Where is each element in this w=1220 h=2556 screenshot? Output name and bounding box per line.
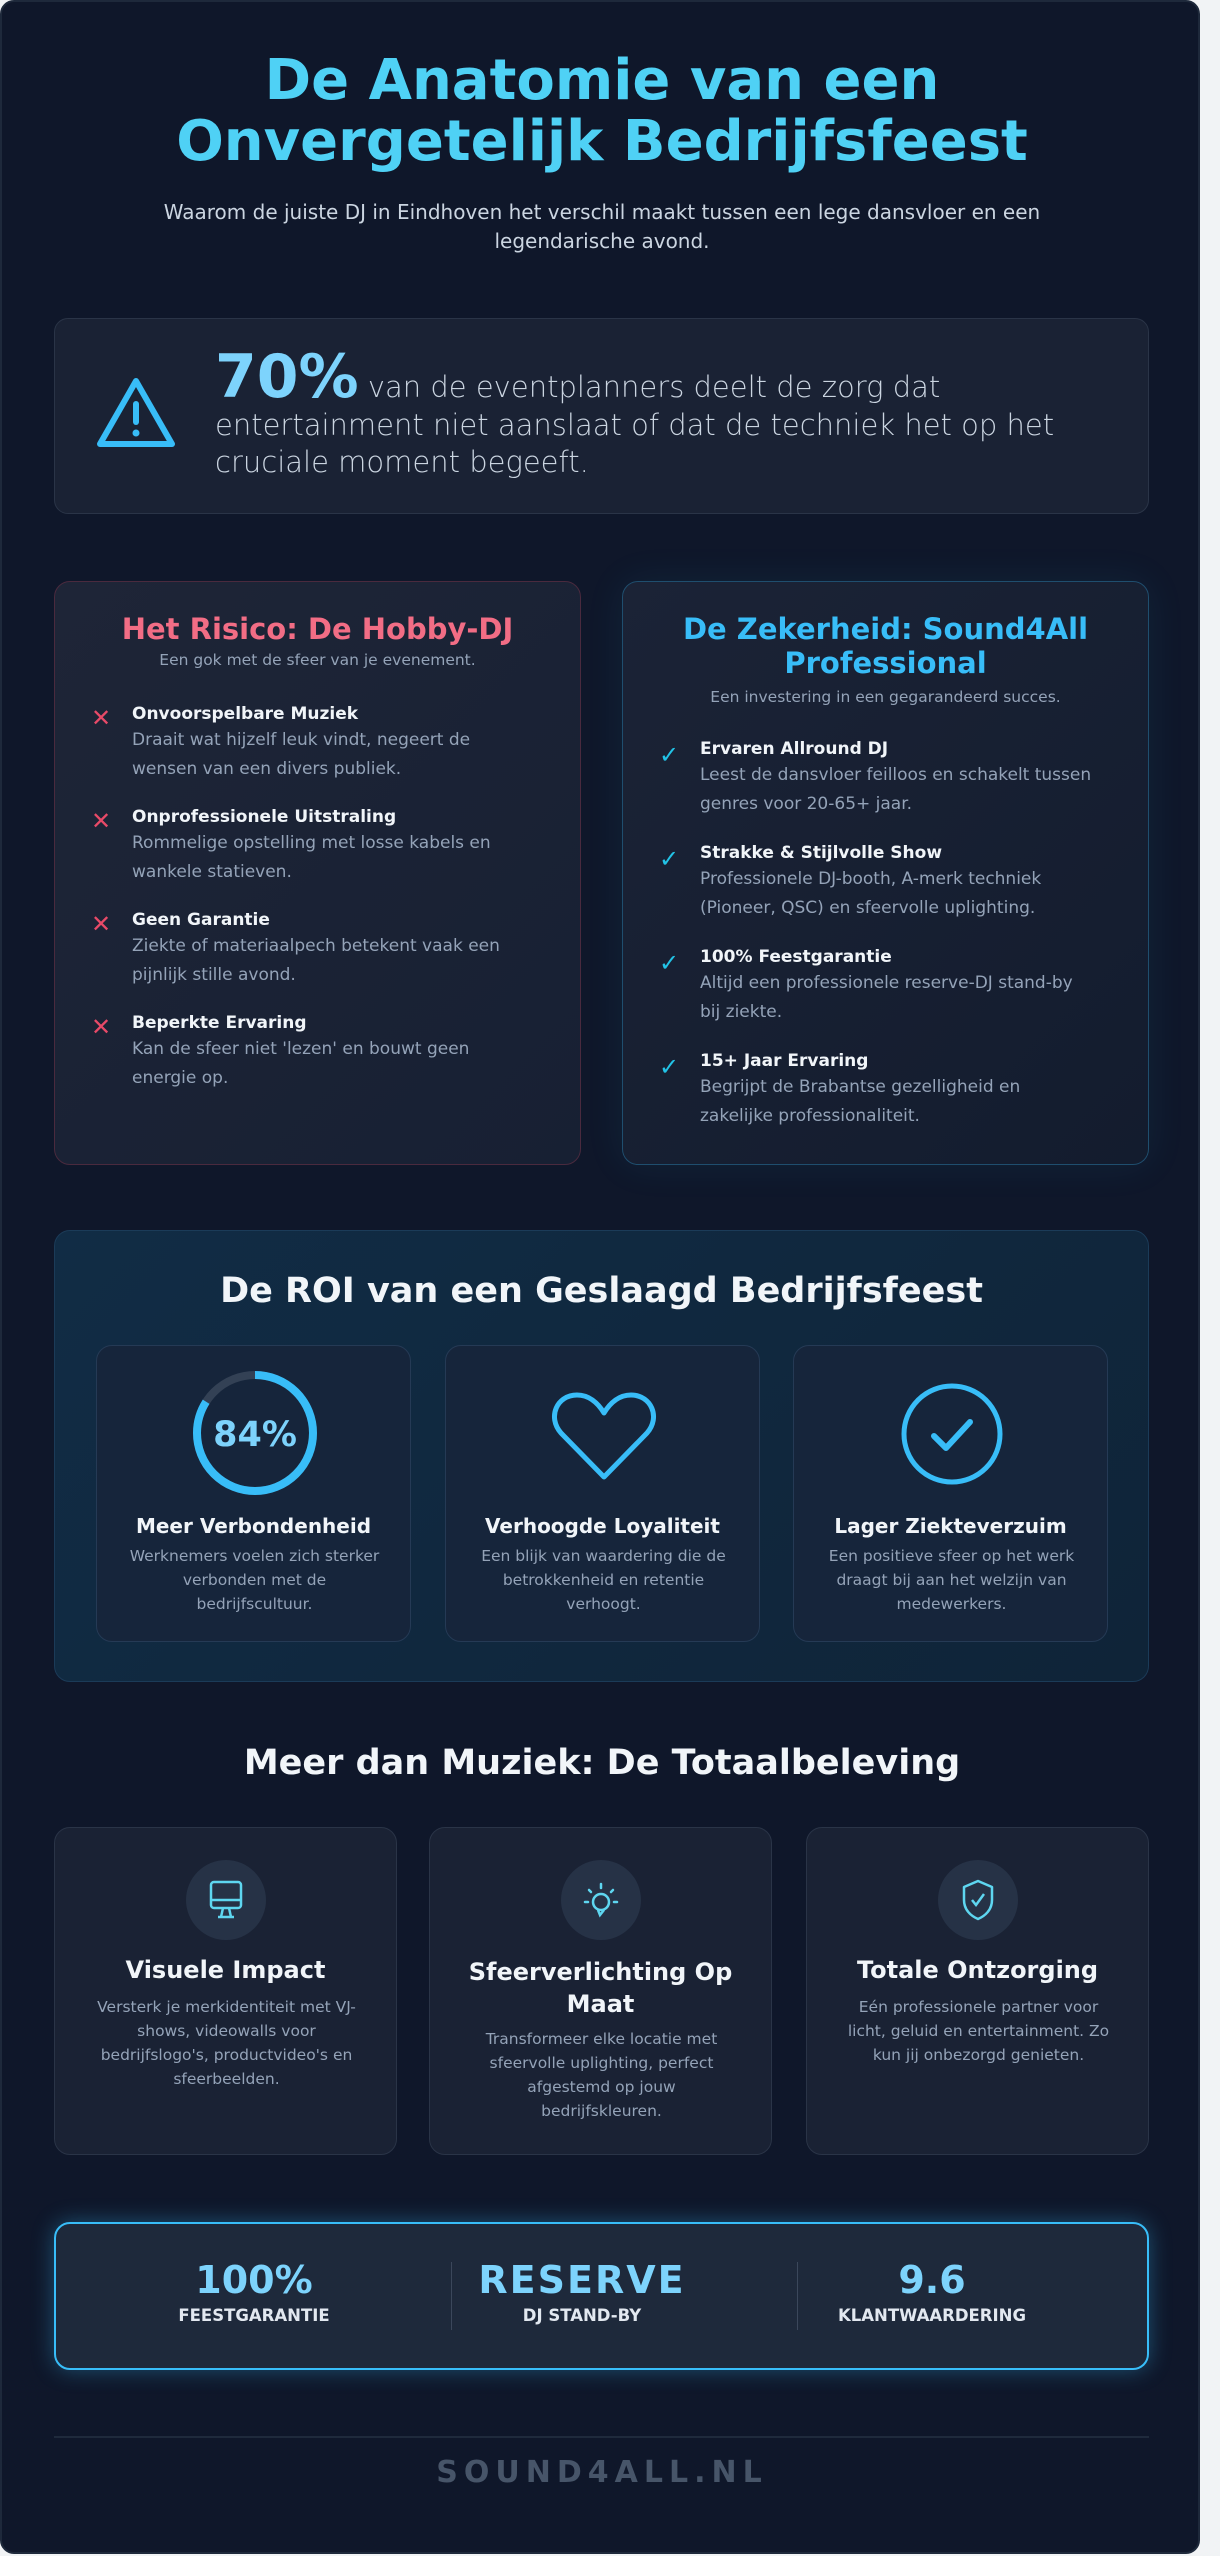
icon: shield (938, 1860, 1018, 1940)
item: feestgarantie: Altijd een professionele reserve-DJ stand-by bij ziekte. (700, 973, 1073, 1022)
item: beperkte ervaring: Beperkte Ervaring (132, 1013, 306, 1033)
item: feestgarantie: 100% Feestgarantie (700, 947, 892, 967)
chart: 84% ring: 84% (213, 1415, 297, 1455)
card: verbondenheid: Werknemers voelen zich sterker (130, 1547, 379, 1565)
card: sfeerverlichting: Maat (567, 1990, 634, 2018)
heading: De Zekerheid: Sound4All (683, 612, 1088, 646)
icon: lightbulb (561, 1860, 641, 1940)
card: sfeerverlichting: Transformeer elke locatie met sfeervolle uplighting, perfect afgestemd op jouw bedrijfskleuren. (486, 2030, 717, 2120)
item: ervaring: Begrijpt de Brabantse gezelligheid en zakelijke professionaliteit. (700, 1077, 1020, 1126)
card: sfeerverlichting (429, 1827, 772, 2155)
stat: 9.6 (838, 2258, 1026, 2325)
item: onvoorspelbare muziek (91, 704, 470, 779)
item: ervaring: ✓ (659, 1053, 679, 1081)
subheading: Een investering in een gegarandeerd succes. (710, 688, 1061, 706)
item: onvoorspelbare muziek: Draait wat hijzelf leuk vindt, negeert de wensen van een divers publiek. (132, 730, 470, 779)
card: verbondenheid (96, 1345, 411, 1642)
item: beperkte ervaring (91, 1013, 469, 1088)
subheading: Een gok met de sfeer van je evenement. (159, 651, 476, 669)
item: onprofessionele uitstraling: Rommelige opstelling met losse kabels en wankele statieven. (132, 833, 491, 882)
item: onprofessionele uitstraling: Onprofessionele Uitstraling (132, 807, 396, 827)
chart: 84% ring (193, 1371, 317, 1495)
card: ziekteverzuim: Een positieve sfeer op het werk draagt bij aan het welzijn van medewerkers. (829, 1547, 1074, 1613)
panel: ROI (54, 1230, 1149, 1682)
heading: totaalbeleving: Meer dan Muziek: De Totaalbeleving (244, 1743, 960, 1783)
card: visuele impact (54, 1827, 397, 2155)
item: show: ✓ (659, 845, 679, 873)
benefit list (659, 739, 1091, 1126)
panel: stat 70% (54, 318, 1149, 514)
card: ziekteverzuim: Lager Ziekteverzuim (834, 1514, 1067, 1538)
stat: 100%: 100% (195, 2258, 313, 2302)
card: sfeerverlichting: Sfeerverlichting Op (469, 1958, 732, 1986)
card: totale ontzorging: Eén professionele partner voor (859, 1998, 1098, 2016)
stat: 100%: FEESTGARANTIE (178, 2306, 330, 2325)
item: show: Professionele DJ-booth, A-merk techniek (Pioneer, QSC) en sfeervolle uplighting. (700, 869, 1041, 918)
item: ervaring (659, 1051, 1020, 1126)
panel: zekerheid sound4all (622, 581, 1149, 1165)
card: verbondenheid: verbonden met de (183, 1571, 326, 1589)
item: allround dj: Ervaren Allround DJ (700, 739, 888, 759)
card: verbondenheid: Meer Verbondenheid (136, 1514, 371, 1538)
heading: Professional (784, 646, 987, 680)
item: feestgarantie (659, 947, 1073, 1022)
panel: kernstatistieken (54, 2222, 1149, 2370)
card: totale ontzorging: licht, geluid en entertainment. Zo kun jij onbezorgd genieten. (848, 2022, 1109, 2064)
item: geen garantie: Geen Garantie (132, 910, 270, 930)
item: allround dj: Leest de dansvloer feilloos en schakelt tussen genres voor 20-65+ jaar. (700, 765, 1091, 814)
card: verbondenheid: bedrijfscultuur. (196, 1595, 312, 1613)
icon: warning (97, 378, 175, 447)
item: show: Strakke & Stijlvolle Show (700, 843, 942, 863)
item: onprofessionele uitstraling (91, 807, 491, 882)
title (176, 48, 1028, 174)
panel: risico hobby-dj (54, 581, 581, 1165)
item: beperkte ervaring: ✕ (91, 1013, 111, 1041)
icon: check circle (902, 1384, 1002, 1484)
card: totale ontzorging (806, 1827, 1149, 2155)
card: loyaliteit: Verhoogde Loyaliteit (485, 1514, 720, 1538)
item: onvoorspelbare muziek: Onvoorspelbare Muziek (132, 704, 358, 724)
item: geen garantie: Ziekte of materiaalpech betekent vaak een pijnlijk stille avond. (132, 936, 500, 985)
stat: 9.6: 9.6 (898, 2258, 966, 2302)
stat: reserve (478, 2258, 686, 2325)
item: geen garantie: ✕ (91, 910, 111, 938)
card: visuele impact: Versterk je merkidentiteit met VJ-shows, videowalls voor bedrijfslogo's, productvideo's en sfeerbeelden. (97, 1998, 356, 2088)
icon: monitor (186, 1860, 266, 1940)
item: allround dj: ✓ (659, 741, 679, 769)
item: allround dj (659, 739, 1091, 814)
item: feestgarantie: ✓ (659, 949, 679, 977)
item: onprofessionele uitstraling: ✕ (91, 807, 111, 835)
card: visuele impact: Visuele Impact (126, 1956, 325, 1984)
item: show (659, 843, 1041, 918)
stat: reserve: RESERVE (478, 2258, 686, 2302)
item: beperkte ervaring: Kan de sfeer niet 'lezen' en bouwt geen energie op. (132, 1039, 469, 1088)
card: loyaliteit: Een blijk van waardering die de betrokkenheid en retentie verhoogt. (481, 1547, 726, 1613)
stat text: 70% van de eventplanners deelt de zorg dat entertainment niet aanslaat of dat de techniek het op het cruciale moment begeeft. (215, 342, 1054, 479)
item: geen garantie (91, 910, 500, 985)
stat: 100% (178, 2258, 330, 2325)
risk list (91, 704, 500, 1088)
icon: heart (552, 1392, 656, 1480)
subtitle: Waarom de juiste DJ in Eindhoven het verschil maakt tussen een lege dansvloer en een legendarische avond. (164, 200, 1040, 253)
title: Onvergetelijk Bedrijfsfeest (176, 109, 1028, 174)
stat: 9.6: KLANTWAARDERING (838, 2306, 1026, 2325)
item: ervaring: 15+ Jaar Ervaring (700, 1051, 868, 1071)
footer brand: SOUND4ALL.NL (436, 2455, 768, 2490)
card: loyaliteit (445, 1345, 760, 1642)
item: onvoorspelbare muziek: ✕ (91, 704, 111, 732)
title: De Anatomie van een (265, 48, 939, 113)
heading (683, 612, 1088, 680)
card: ziekteverzuim (793, 1345, 1108, 1642)
heading: De ROI van een Geslaagd Bedrijfsfeest (220, 1271, 983, 1311)
heading: Het Risico: De Hobby-DJ (122, 612, 513, 646)
stat: reserve: DJ STAND-BY (523, 2306, 641, 2325)
card: totale ontzorging: Totale Ontzorging (857, 1956, 1098, 1984)
